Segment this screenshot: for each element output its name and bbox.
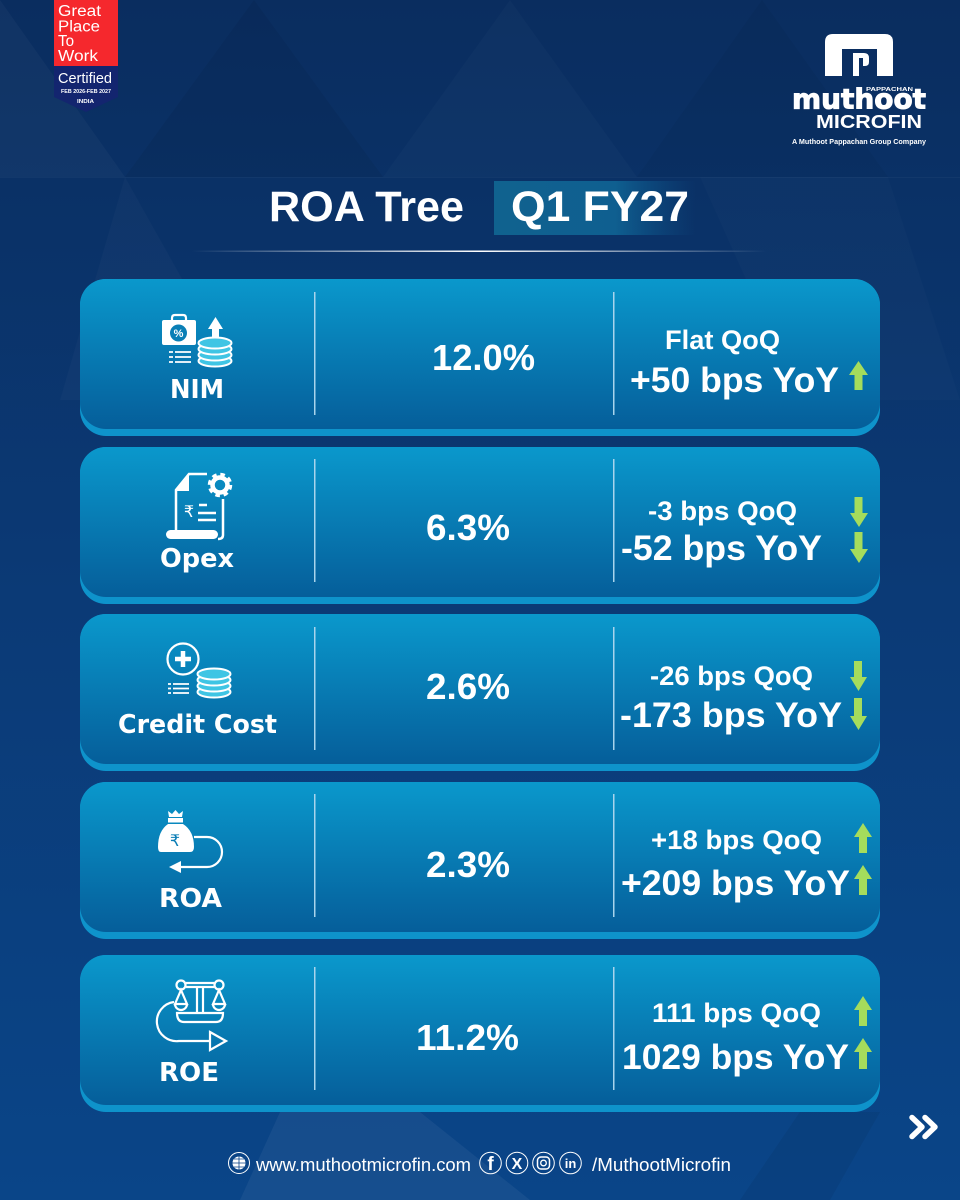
change: Opex: -3 bps QoQ [648, 496, 797, 526]
change: ROA: +18 bps QoQ [651, 825, 822, 855]
arrow: up [849, 361, 868, 390]
footer: website and social links [228, 1152, 731, 1175]
icon: X [506, 1152, 528, 1174]
change: ROE [622, 998, 849, 1077]
icon: document with gear: ₹ [184, 504, 194, 521]
title [269, 181, 696, 235]
change: Credit Cost [620, 661, 842, 735]
value: ROE: 11.2% [416, 1017, 519, 1058]
label: ROE: ROE [159, 1058, 219, 1088]
panel: NIM [80, 279, 880, 436]
icon: facebook [480, 1152, 501, 1175]
icon: globe [228, 1152, 250, 1174]
change: ROE: 1029 bps YoY [622, 1038, 849, 1077]
footer: website and social links: www.muthootmicrofin.com [255, 1155, 471, 1175]
badge: Great Place To Work certified: INDIA [77, 99, 94, 105]
label: NIM: NIM [170, 375, 224, 405]
value: ROA: 2.3% [426, 844, 510, 885]
badge: Great Place To Work certified: Certified [58, 71, 112, 87]
panel: ROA [80, 782, 880, 939]
arrows: down [850, 497, 868, 563]
label: ROA: ROA [159, 884, 222, 914]
logo: Muthoot Microfin: MICROFIN [816, 111, 922, 132]
label: Opex: Opex [160, 544, 234, 574]
badge: Great Place To Work certified: FEB 2026-FEB 2027 [61, 89, 111, 95]
change: ROE: 111 bps QoQ [652, 998, 821, 1028]
label: Credit Cost: Credit Cost [118, 710, 277, 740]
change: Opex: -52 bps YoY [621, 529, 822, 568]
icon: briefcase and coins: % [174, 328, 184, 340]
change: Opex [621, 496, 822, 568]
icon: linkedin: in [565, 1156, 576, 1171]
logo: Muthoot Microfin: muthoot [792, 82, 926, 116]
logo: Muthoot Microfin: A Muthoot Pappachan Group Company [792, 137, 927, 146]
icon: document with gear [166, 474, 230, 539]
change: Credit Cost: -26 bps QoQ [650, 661, 813, 691]
badge: Great Place To Work certified: Place [58, 18, 100, 36]
icon: next chevrons [912, 1118, 935, 1136]
title tag: quarter: Q1 FY27 [511, 183, 689, 231]
icon: briefcase and coins [162, 315, 232, 366]
icon: scales with arrow [157, 980, 226, 1050]
change: NIM: +50 bps YoY [630, 361, 839, 400]
footer: website and social links: /MuthootMicrofin [592, 1155, 731, 1175]
panel: ROE [80, 955, 880, 1112]
logo: Muthoot Microfin [792, 34, 927, 146]
icon: instagram [533, 1152, 554, 1174]
icon: money bag with loop arrow [158, 810, 222, 873]
value: Opex: 6.3% [426, 507, 510, 548]
change: Credit Cost: -173 bps YoY [620, 696, 842, 735]
change: ROA [621, 825, 850, 903]
change: NIM: Flat QoQ [665, 325, 780, 355]
title: ROA Tree [269, 183, 464, 231]
icon: money bag with loop arrow: ₹ [170, 833, 180, 850]
change: ROA: +209 bps YoY [621, 864, 850, 903]
icon: X: X [512, 1156, 523, 1173]
value: Credit Cost: 2.6% [426, 666, 510, 707]
arrows: up [854, 996, 872, 1069]
icon: plus and coins [168, 644, 230, 698]
arrows: up [854, 823, 872, 895]
arrows: down [850, 661, 867, 730]
badge: Great Place To Work certified: Work [58, 48, 98, 65]
panel: Opex [80, 447, 880, 604]
icon: linkedin [560, 1152, 581, 1174]
badge: Great Place To Work certified: Great [58, 3, 102, 20]
badge: Great Place To Work certified: To [58, 33, 74, 50]
panel: Credit Cost [80, 614, 880, 771]
value: NIM: 12.0% [432, 337, 535, 378]
badge: Great Place To Work certified [54, 0, 118, 112]
change: NIM [630, 325, 839, 400]
icon: facebook: f [487, 1154, 494, 1175]
logo: Muthoot Microfin: PAPPACHAN [866, 87, 914, 93]
